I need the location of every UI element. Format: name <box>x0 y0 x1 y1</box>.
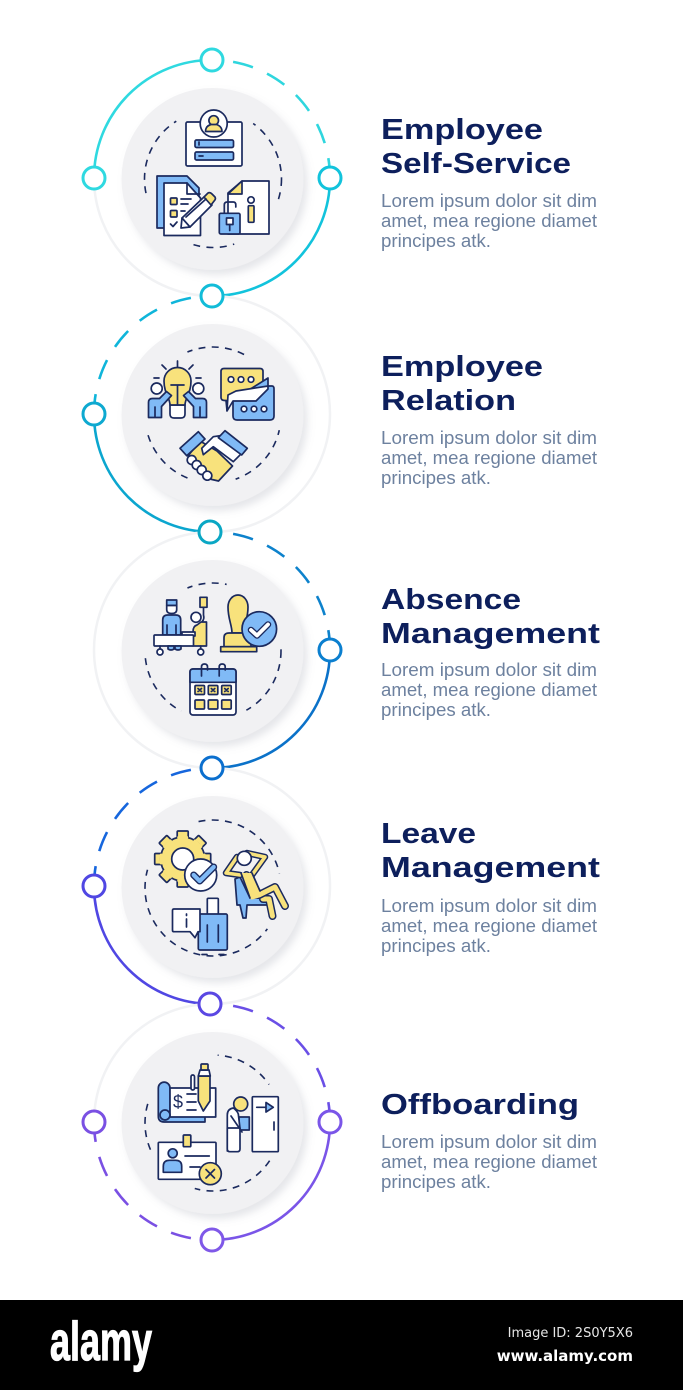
text block: absence management: Absence <box>381 584 521 616</box>
text block: employee self-service: Employee <box>381 114 543 146</box>
text block: absence management: Lorem ipsum dolor sit dim <box>381 660 597 680</box>
text block: leave management: Leave <box>381 818 476 850</box>
text block: offboarding: Offboarding <box>381 1089 579 1121</box>
footer: alamy banner: www.alamy.com <box>497 1347 633 1365</box>
icon: info speech bubble and suitcase <box>172 898 227 954</box>
icon: cheque and pen: $ <box>173 1092 183 1112</box>
icon: handshake <box>180 431 247 481</box>
footer: alamy banner: Image ID: 2S0Y5X6 <box>508 1326 633 1341</box>
text block: employee self-service: principes atk. <box>381 231 491 251</box>
text block: leave management: Management <box>381 852 600 884</box>
text block: offboarding: Lorem ipsum dolor sit dim <box>381 1132 597 1152</box>
text block: employee relation <box>381 351 597 488</box>
step 4: leave management ring <box>75 749 349 1023</box>
text block: offboarding: amet, mea regione diamet <box>381 1152 597 1172</box>
text block: leave management: Lorem ipsum dolor sit dim <box>381 896 597 916</box>
text block: offboarding <box>381 1089 597 1192</box>
text block: employee relation: Lorem ipsum dolor sit dim <box>381 428 597 448</box>
icon: chat bubbles <box>221 368 274 420</box>
panel: step 5 disc and icons <box>119 1029 307 1217</box>
step 5: offboarding ring <box>75 985 349 1259</box>
step 3: absence management ring <box>75 513 349 787</box>
panel: step 4 disc and icons <box>122 796 304 978</box>
text block: employee self-service <box>381 114 597 251</box>
step 1: employee self-service ring <box>75 41 349 315</box>
text block: employee self-service: Lorem ipsum dolor sit dim <box>381 191 597 211</box>
text block: leave management: amet, mea regione diamet <box>381 916 597 936</box>
icon: people holding light bulb <box>148 361 206 418</box>
icon: info document and padlock <box>219 181 269 234</box>
panel: step 2 disc and icons <box>120 322 306 508</box>
icon: cheque and pen <box>158 1064 216 1122</box>
icon: id card <box>186 110 242 166</box>
icon: gear with check mark <box>155 831 217 891</box>
icon: calendar <box>190 664 236 715</box>
text block: leave management: principes atk. <box>381 936 491 956</box>
text block: employee relation: amet, mea regione diamet <box>381 448 597 468</box>
text block: employee self-service: amet, mea regione diamet <box>381 211 597 231</box>
connector nodes <box>83 49 341 1251</box>
icon: approval stamp with check badge <box>221 595 277 652</box>
text block: absence management: principes atk. <box>381 700 491 720</box>
text block: employee relation: principes atk. <box>381 468 491 488</box>
text block: absence management <box>381 584 600 720</box>
text block: employee self-service: Self-Service <box>381 148 571 180</box>
text block: leave management <box>381 818 600 956</box>
text block: employee relation: Employee <box>381 351 543 383</box>
icon: person relaxing in chair <box>226 851 285 918</box>
text block: offboarding: principes atk. <box>381 1172 491 1192</box>
panel: step 1 disc and icons <box>119 85 307 273</box>
panel: step 3 disc and icons <box>121 559 305 743</box>
step 2: employee relation ring <box>75 277 349 551</box>
icon: cancelled id badge <box>158 1135 221 1185</box>
icon: patient in hospital bed with doctor <box>154 597 207 655</box>
text block: absence management: Management <box>381 618 600 650</box>
icon: checklist document and pencil <box>157 176 215 236</box>
text block: absence management: amet, mea regione diamet <box>381 680 597 700</box>
text block: employee relation: Relation <box>381 385 516 417</box>
icon: person leaving through exit door <box>227 1097 278 1152</box>
footer: alamy banner <box>0 1300 683 1390</box>
footer: alamy banner: alamy <box>50 1310 152 1372</box>
